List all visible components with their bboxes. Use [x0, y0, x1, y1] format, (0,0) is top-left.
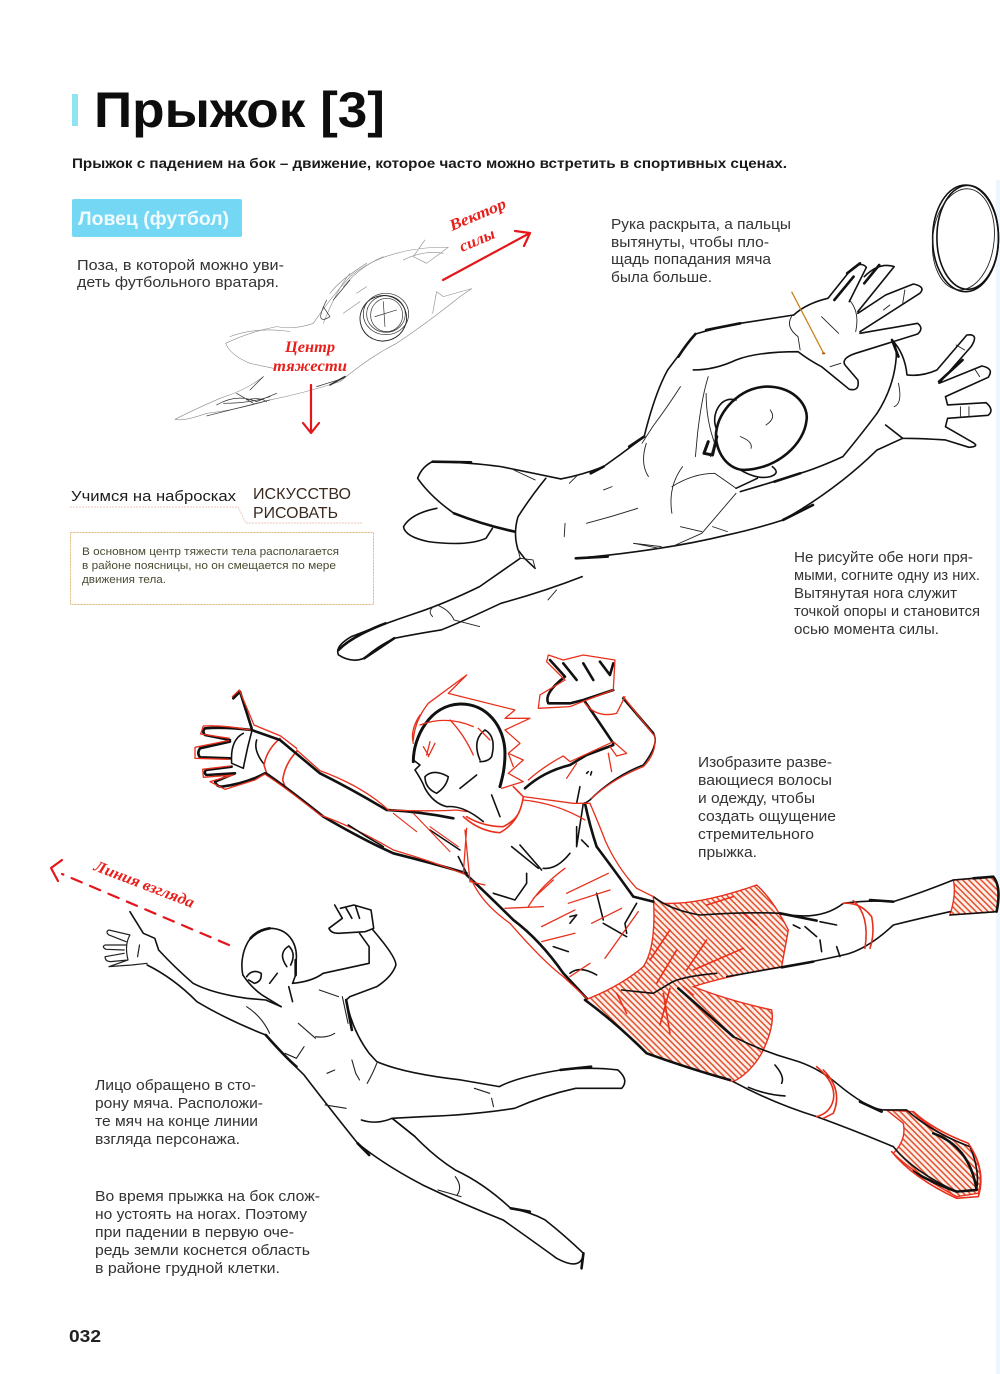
note box: В основном центр тяжести тела располагается — [82, 546, 339, 558]
text: flying hair and clothes: прыжка. — [698, 845, 757, 861]
underside of body and second arm — [576, 438, 903, 558]
label: centre of gravity: тяжести — [273, 358, 347, 375]
text: pose description — [77, 258, 284, 291]
shorts — [585, 885, 788, 1082]
text: open hand: щадь попадания мяча — [611, 252, 772, 268]
upper leg lines — [780, 877, 998, 916]
outstretched arm — [252, 730, 467, 873]
note box: движения тела. — [82, 574, 166, 586]
gesture sketch — [175, 240, 472, 420]
goalkeeper figure — [338, 185, 999, 660]
arrow: gravity — [303, 385, 319, 433]
text: flying hair and clothes: Изобразите разве- — [698, 755, 832, 771]
left hand — [195, 690, 297, 789]
text: landing on chest: редь земли коснется область — [95, 1243, 310, 1259]
muscle lines — [430, 377, 736, 627]
torso and legs — [346, 1000, 625, 1118]
lower leg lines — [678, 988, 977, 1192]
torso — [467, 803, 653, 998]
text: face toward ball: рону мяча. Расположи- — [95, 1096, 263, 1112]
text: legs advice: осью момента силы. — [794, 622, 939, 638]
raised arm and fist — [525, 655, 655, 803]
text: legs advice — [794, 550, 980, 638]
label: centre of gravity: Центр — [284, 339, 335, 356]
text: legs advice: Вытянутая нога служит — [794, 586, 957, 602]
section tag: goalkeeper — [72, 199, 242, 237]
note box — [70, 532, 374, 604]
text: flying hair and clothes: стремительного — [698, 827, 814, 843]
label: line of sight: Линия взгляда — [91, 857, 197, 912]
anatomy lines — [247, 990, 493, 1197]
title accent bar — [72, 94, 78, 126]
text: open hand — [611, 217, 791, 286]
shoe top — [950, 877, 998, 915]
text: face toward ball — [95, 1078, 263, 1148]
head — [242, 928, 296, 983]
text: flying hair and clothes: и одежду, чтобы — [698, 791, 815, 807]
heading: learn from sketches: Учимся на набросках — [71, 488, 237, 505]
label: force vector — [446, 196, 509, 256]
text: legs advice: точкой опоры и становится — [794, 604, 980, 620]
arrow: force vector — [443, 231, 530, 280]
page number: 032 — [69, 1326, 101, 1346]
head — [412, 675, 530, 833]
text: landing on chest: в районе грудной клетки. — [95, 1261, 280, 1277]
text: pose description: Поза, в которой можно уви- — [77, 258, 284, 274]
text: legs advice: мыми, согните одну из них. — [794, 568, 980, 584]
text: open hand: Рука раскрыта, а пальцы — [611, 217, 791, 233]
text: face toward ball: взгляда персонажа. — [95, 1132, 240, 1148]
shoe bottom — [887, 1110, 980, 1197]
text: legs advice: Не рисуйте обе ноги пря- — [794, 550, 973, 566]
hand — [103, 930, 147, 967]
raised arm and torso outline — [561, 315, 794, 479]
section tag: goalkeeper: Ловец (футбол) — [78, 209, 229, 230]
title: Прыжок [3] — [94, 82, 385, 138]
note box: в районе поясницы, но он смещается по мере — [82, 560, 336, 572]
text: landing on chest: но устоять на ногах. Поэтому — [95, 1207, 308, 1223]
text: flying hair and clothes: вающиеся волосы — [698, 773, 832, 789]
label: centre of gravity — [273, 339, 347, 375]
head — [704, 387, 807, 488]
text: flying hair and clothes — [698, 755, 836, 861]
red clothed figure: legs and shorts — [585, 877, 998, 1198]
heading: learn from sketches — [70, 486, 362, 523]
text: face toward ball: те мяч на конце линии — [95, 1114, 258, 1130]
bare figure reference — [103, 905, 625, 1268]
text: landing on chest — [95, 1189, 320, 1277]
upper hand — [693, 263, 922, 390]
text: landing on chest: при падении в первую оче- — [95, 1225, 294, 1241]
heading: learn from sketches: ИСКУССТВО — [253, 486, 351, 503]
subtitle: Прыжок с падением на бок – движение, которое часто можно встретить в спортивных сценах. — [72, 155, 787, 171]
second hand — [877, 335, 991, 447]
heading: learn from sketches: РИСОВАТЬ — [253, 505, 338, 522]
bent leg — [418, 462, 561, 532]
pointer line on palm — [792, 292, 825, 354]
label: force vector: Вектор — [446, 196, 509, 235]
arrow: line of sight — [51, 860, 229, 945]
text: face toward ball: Лицо обращено в сто- — [95, 1078, 256, 1094]
label: force vector: силы — [457, 226, 498, 256]
ball — [928, 185, 999, 292]
text: flying hair and clothes: создать ощущение — [698, 809, 836, 825]
text: open hand: была больше. — [611, 270, 712, 286]
arm and body outline — [130, 912, 281, 1007]
red clothed figure: upper body — [195, 655, 655, 998]
raised arm and fist — [293, 930, 396, 1000]
text: pose description: деть футбольного вратаря. — [77, 275, 279, 291]
text: landing on chest: Во время прыжка на бок слож- — [95, 1189, 320, 1205]
text: open hand: вытянуты, чтобы пло- — [611, 235, 769, 251]
torso side and straight leg — [515, 478, 546, 568]
wrist band — [264, 738, 297, 787]
